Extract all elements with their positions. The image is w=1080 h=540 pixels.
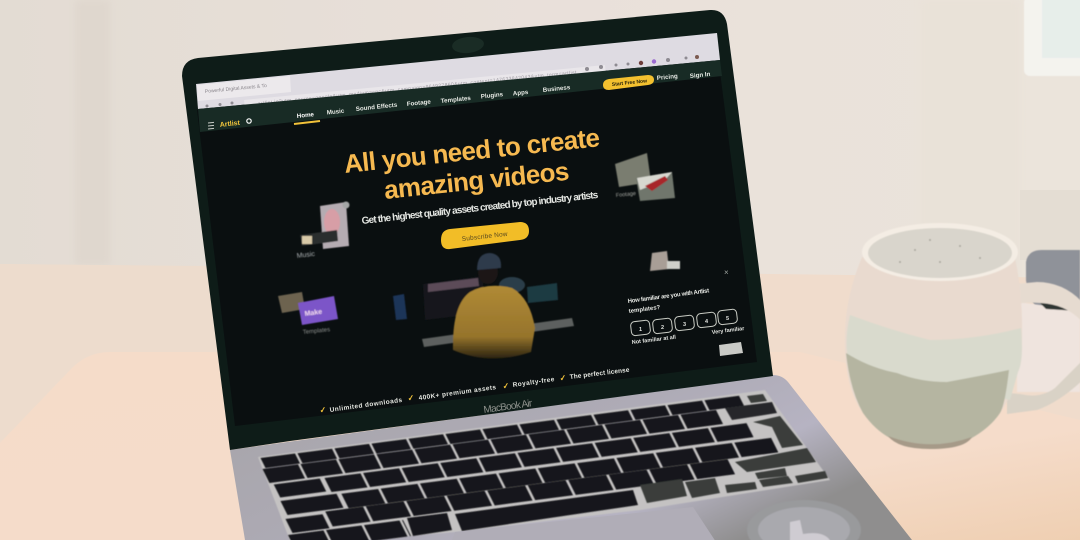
start free now button: Start Free Now: [612, 78, 647, 88]
music label: Music: [296, 251, 316, 260]
person at a desk with monitors: [393, 253, 574, 359]
table: [0, 264, 1080, 540]
mug rim: [862, 223, 1018, 281]
headline: All you need to create: [342, 122, 601, 179]
mug: [845, 223, 1080, 449]
address text: artlist.io?utm_source=google&utm_medium=cpc&utm_campaign=964927860&utm_content=147633842043&utm_term=artlist: [258, 70, 577, 107]
survey question: How familiar are you with Artlist: [627, 288, 710, 305]
shift row: [289, 521, 326, 526]
feature checklist: The perfect license: [569, 367, 630, 381]
space bar: [455, 490, 638, 531]
active nav underline: [294, 121, 320, 124]
feature checklist: Unlimited downloads: [329, 397, 403, 414]
nav links: Music: [326, 108, 345, 116]
mug foot: [888, 436, 972, 449]
nav links: Plugins: [480, 91, 504, 100]
rating numbers: 2: [661, 325, 664, 331]
scale labels: Not familiar at all: [632, 335, 677, 346]
right-hand and modifier keys: [407, 394, 828, 536]
cap: [477, 253, 501, 270]
monitors: [423, 276, 484, 320]
nav links: Apps: [512, 89, 529, 97]
webcam cover: [451, 35, 485, 55]
nav links: Business: [542, 84, 571, 94]
nav links: Pricing: [656, 73, 678, 82]
rating numbers: 4: [705, 319, 709, 325]
feature checklist: ✓: [407, 393, 415, 403]
bottom row: [292, 528, 407, 540]
footage card: [615, 153, 675, 201]
headline: [342, 122, 601, 205]
site nav bar: [198, 60, 722, 132]
feature checklist: [319, 367, 630, 415]
browser tab title: Powerful Digital Assets & To: [205, 83, 267, 95]
keyboard: [263, 394, 828, 540]
nav links: Sign In: [689, 71, 711, 80]
Artlist logo: Artlist: [219, 120, 241, 129]
laptop base: [230, 375, 912, 540]
number row: [266, 417, 722, 476]
background: wall: [0, 0, 1080, 290]
browser chrome: [196, 33, 720, 109]
survey: Very familiar: [712, 326, 746, 336]
mug lower glaze: [846, 353, 1009, 445]
templates label: Templates: [303, 327, 330, 336]
close icon: ×: [724, 268, 729, 277]
trackpad: [450, 507, 718, 540]
templates card: Make: [304, 309, 323, 318]
MacBook Air label: MacBook Air: [483, 398, 534, 416]
laptop: [182, 10, 912, 540]
nav links: Templates: [440, 95, 472, 105]
small thumbnail: [650, 251, 680, 271]
rating numbers: 3: [683, 322, 686, 328]
rating numbers: [639, 316, 729, 333]
search icon: [247, 119, 251, 123]
subscribe button: [441, 222, 529, 249]
mug speckles: [899, 239, 981, 263]
headline: amazing videos: [382, 156, 571, 205]
subheading: Get the highest quality assets created by top industry artists: [361, 190, 599, 227]
feature checklist: ✓: [319, 405, 327, 415]
survey: templates?: [628, 305, 661, 315]
shirt: [453, 286, 535, 359]
feature checklist: ✓: [502, 381, 510, 391]
screen: [197, 56, 757, 426]
templates card: [278, 292, 338, 336]
nav links: Sound Effects: [355, 102, 398, 113]
window in the top right corner: [1024, 0, 1080, 76]
desk: [422, 318, 574, 347]
rating numbers: 1: [639, 327, 642, 333]
home row: [284, 501, 340, 508]
footage label: Footage: [616, 191, 636, 199]
mug glaze band: [846, 315, 1022, 400]
rating numbers: 5: [726, 316, 729, 322]
mug interior: [868, 228, 1012, 278]
placemat: [0, 352, 1080, 540]
survey: [627, 288, 746, 356]
nav links: Footage: [406, 98, 432, 108]
feature checklist: 400K+ premium assets: [418, 384, 497, 402]
toolbar icons: [206, 55, 699, 108]
laptop lid and bezel: [182, 10, 773, 450]
address bar: [244, 65, 606, 109]
head: [478, 260, 498, 284]
round sticker on palm rest: [747, 500, 861, 540]
subscribe button: Subscribe Now: [461, 231, 508, 243]
keyboard well: [258, 390, 830, 540]
mug handle: [1007, 282, 1080, 414]
tablet behind the mug: [1026, 250, 1080, 311]
function row: [263, 400, 744, 463]
mug body: [845, 257, 1022, 445]
browser tab: [197, 76, 291, 101]
nav links: [296, 71, 711, 120]
submit button: [719, 342, 743, 356]
music card: [296, 202, 350, 260]
nav links: Home: [296, 111, 315, 120]
feature checklist: Royalty-free: [512, 376, 555, 389]
rating boxes: [630, 309, 738, 336]
feature checklist: ✓: [559, 373, 567, 383]
menu icon: [208, 122, 214, 129]
QWERTY row: [277, 485, 323, 491]
start free now button: [603, 75, 654, 90]
